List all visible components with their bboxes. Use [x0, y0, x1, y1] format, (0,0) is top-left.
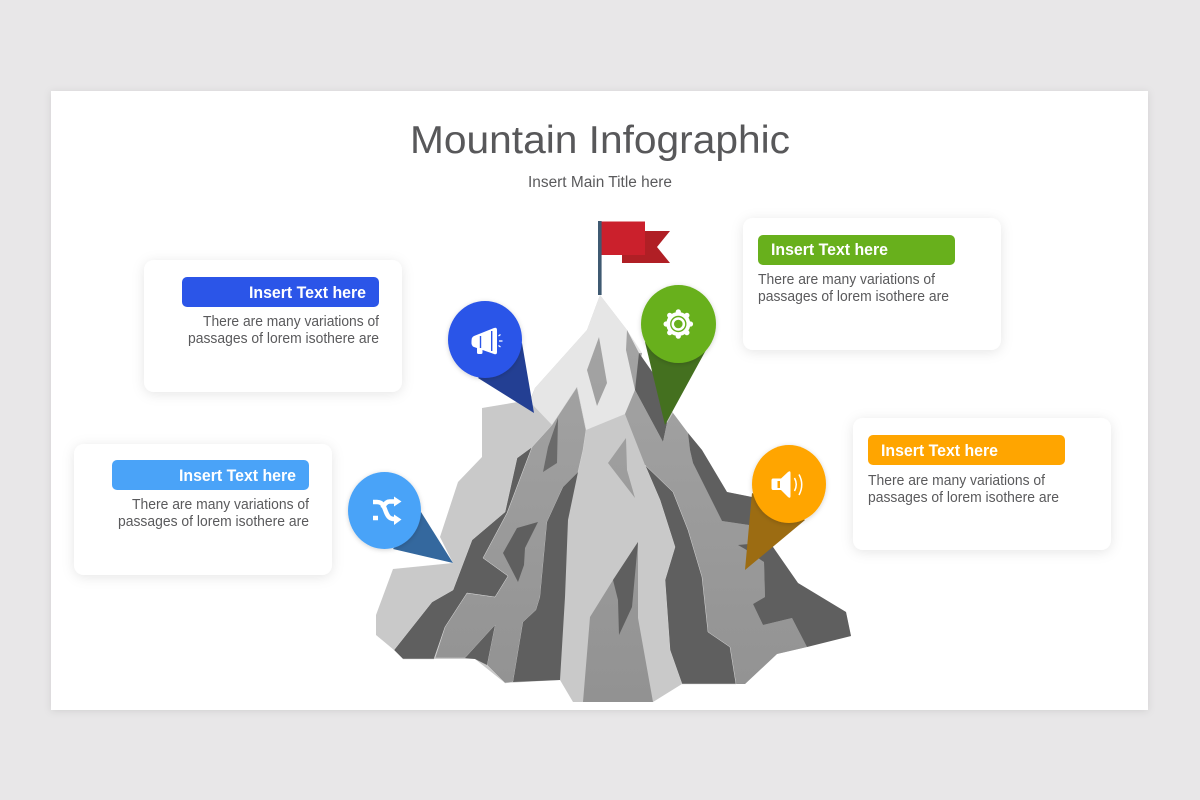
heading bar: blue — [182, 277, 379, 307]
icon: gear — [664, 309, 693, 339]
panel: green text card — [743, 218, 1001, 350]
slide background — [51, 91, 1148, 710]
heading bar: light blue — [112, 460, 309, 490]
map pin: blue with megaphone — [448, 301, 534, 413]
body text: blue card — [188, 314, 380, 347]
body text: blue card: There are many variations of — [203, 314, 380, 330]
body text: green card: There are many variations of — [758, 272, 936, 288]
body text: green card: passages of lorem isothere are — [758, 289, 949, 305]
subtitle: Insert Main Title here — [528, 174, 672, 191]
icon: speaker — [772, 471, 802, 498]
map pin: orange with speaker — [745, 445, 826, 570]
heading bar: orange: Insert Text here — [881, 441, 998, 460]
icon: megaphone — [471, 328, 502, 354]
title: Mountain Infographic — [410, 119, 790, 162]
map pin: light blue with shuffle — [348, 472, 453, 563]
heading bar: green — [758, 235, 955, 265]
heading bar: green: Insert Text here — [771, 240, 888, 259]
panel: light blue text card — [74, 444, 332, 575]
heading bar: light blue: Insert Text here — [179, 466, 296, 485]
body text: orange card — [868, 473, 1059, 506]
heading bar: orange — [868, 435, 1065, 465]
icon: red flag on pole — [598, 221, 670, 295]
body text: orange card: passages of lorem isothere are — [868, 490, 1059, 506]
body text: light blue card — [118, 497, 310, 530]
body text: green card — [758, 272, 949, 305]
mountain illustration — [376, 295, 851, 702]
body text: light blue card: passages of lorem isothere are — [118, 514, 309, 530]
body text: light blue card: There are many variations of — [132, 497, 310, 513]
heading bar: blue: Insert Text here — [249, 283, 366, 302]
body text: orange card: There are many variations of — [868, 473, 1046, 489]
map pin: green with gear — [641, 285, 716, 425]
panel: blue text card — [144, 260, 402, 392]
icon: shuffle arrows — [373, 496, 402, 525]
panel: orange text card — [853, 418, 1111, 550]
body text: blue card: passages of lorem isothere are — [188, 331, 379, 347]
